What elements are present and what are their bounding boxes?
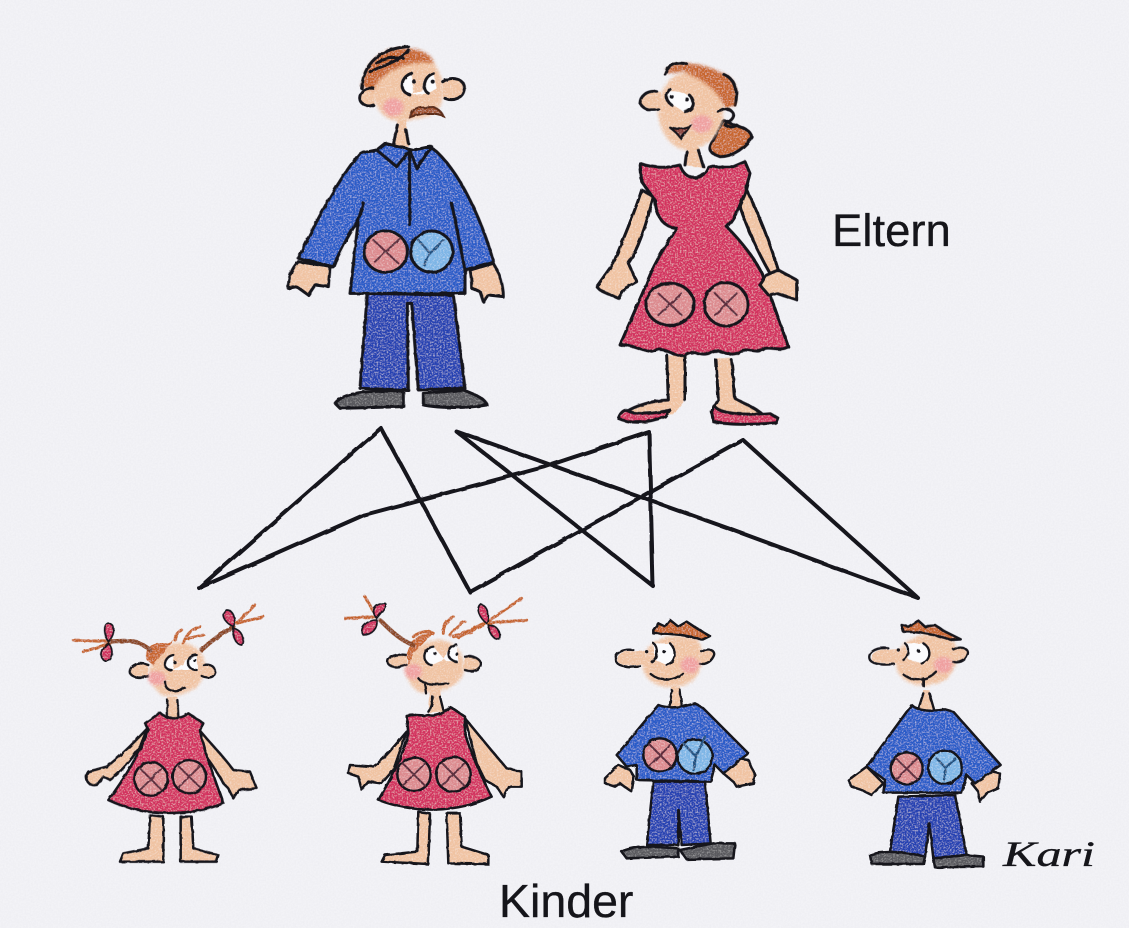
mother neck lines xyxy=(685,150,703,167)
boy 1 shoes xyxy=(622,843,735,859)
chromosome Y on father xyxy=(411,231,453,272)
inheritance lines xyxy=(199,428,918,598)
mother left arm xyxy=(597,190,653,298)
chromosome X on girl 1 (right) xyxy=(173,760,206,793)
chromosome Y on boy 2 xyxy=(928,751,962,784)
label: Kinder: Kinder xyxy=(499,875,633,927)
girl 2 hair and braids xyxy=(345,597,527,665)
chromosome X on mother (left) xyxy=(646,283,694,325)
boy 2 shoes xyxy=(870,852,983,867)
figure: boy 1 xyxy=(605,620,755,859)
chromosome X on father xyxy=(364,231,407,272)
chromosome X on girl 2 (left) xyxy=(397,758,431,791)
boy 2 hands xyxy=(848,767,1000,802)
girl 2 arms xyxy=(348,718,522,797)
girl 1 head xyxy=(130,643,215,696)
father hands xyxy=(288,262,503,302)
boy 2 head xyxy=(869,621,968,686)
boy 1 neck xyxy=(670,687,682,707)
girl 2 neck xyxy=(428,690,443,713)
boy 2 neck xyxy=(918,690,933,710)
boy 2 trousers xyxy=(890,795,967,858)
boy 1 hands xyxy=(605,758,755,792)
figure: girl 2 xyxy=(345,597,527,864)
boy 2 shirt xyxy=(867,705,1001,793)
girl 2 head xyxy=(388,640,481,693)
girl 2 dress xyxy=(378,707,492,810)
boy 1 trousers xyxy=(647,782,711,845)
girl 1 neck lines xyxy=(167,700,178,717)
girl 2 legs and feet xyxy=(382,812,488,864)
girl 1 dress xyxy=(108,713,223,813)
chromosome X on boy 1 xyxy=(643,738,677,772)
mother dress xyxy=(620,162,788,356)
figure: mother xyxy=(597,63,797,424)
label: Eltern: Eltern xyxy=(832,205,951,256)
father shoes xyxy=(335,390,487,408)
figure: boy 2 xyxy=(848,621,1001,867)
boy 1 head xyxy=(615,620,714,687)
girl 1 arms xyxy=(86,728,257,798)
father trousers xyxy=(360,293,465,390)
father head xyxy=(360,47,464,121)
chromosome X on boy 2 xyxy=(891,752,923,784)
chromosome X on girl 1 (left) xyxy=(134,762,168,796)
father shirt xyxy=(298,143,493,293)
girl 1 hair and braids xyxy=(73,605,263,665)
boy 1 neck lines xyxy=(670,690,682,705)
mother neck xyxy=(685,147,705,168)
chromosome X on mother (right) xyxy=(704,283,748,326)
girl 2 neck lines xyxy=(428,697,443,712)
father neck xyxy=(393,120,408,147)
figure: father xyxy=(288,47,503,408)
mother legs xyxy=(627,355,763,416)
figure: girl 1 xyxy=(73,605,263,862)
chromosome X on girl 2 (right) xyxy=(436,757,471,792)
girl 1 legs and feet xyxy=(120,815,218,862)
boy 1 shirt xyxy=(617,703,748,782)
mother right arm xyxy=(740,190,778,273)
girl 1 neck xyxy=(167,697,178,718)
boy 2 neck lines xyxy=(918,693,934,709)
signature: Kari: Kari xyxy=(1002,834,1095,874)
mother shoes xyxy=(618,406,778,424)
father neck lines xyxy=(393,125,408,145)
chromosome Y on boy 1 xyxy=(678,737,712,774)
mother right hand xyxy=(760,270,797,300)
mother head xyxy=(640,63,752,157)
